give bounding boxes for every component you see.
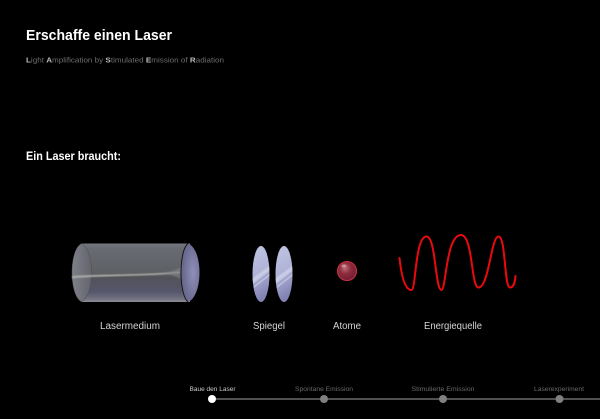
mirror right <box>276 246 292 302</box>
step: Baue den Laser <box>190 386 236 403</box>
icon: atom <box>338 262 356 280</box>
step: Baue den Laser: Baue den Laser <box>190 386 236 393</box>
title: Erschaffe einen Laser <box>26 28 172 44</box>
label: Spiegel: Spiegel <box>253 321 285 332</box>
mirror left <box>252 246 270 302</box>
step: Laserexperiment: Laserexperiment <box>534 386 584 393</box>
step: Stimulierte Emission: Stimulierte Emission <box>412 386 475 393</box>
icon: energy wave <box>400 235 516 290</box>
timeline navigation <box>190 386 600 403</box>
label: Energiequelle: Energiequelle <box>424 321 483 332</box>
step: Stimulierte Emission <box>412 386 475 403</box>
step: Spontane Emission: Spontane Emission <box>295 386 354 393</box>
label: Lasermedium: Lasermedium <box>100 321 160 332</box>
icon: mirrors <box>252 246 292 302</box>
step: Laserexperiment <box>534 386 584 403</box>
label: Atome: Atome <box>333 321 362 332</box>
heading: Ein Laser braucht: Ein Laser braucht: <box>26 151 121 163</box>
step: Spontane Emission <box>295 386 354 403</box>
subtitle: Light Amplification by Stimulated Emission of Radiation <box>26 56 224 64</box>
icon: laser medium cylinder <box>72 244 200 302</box>
